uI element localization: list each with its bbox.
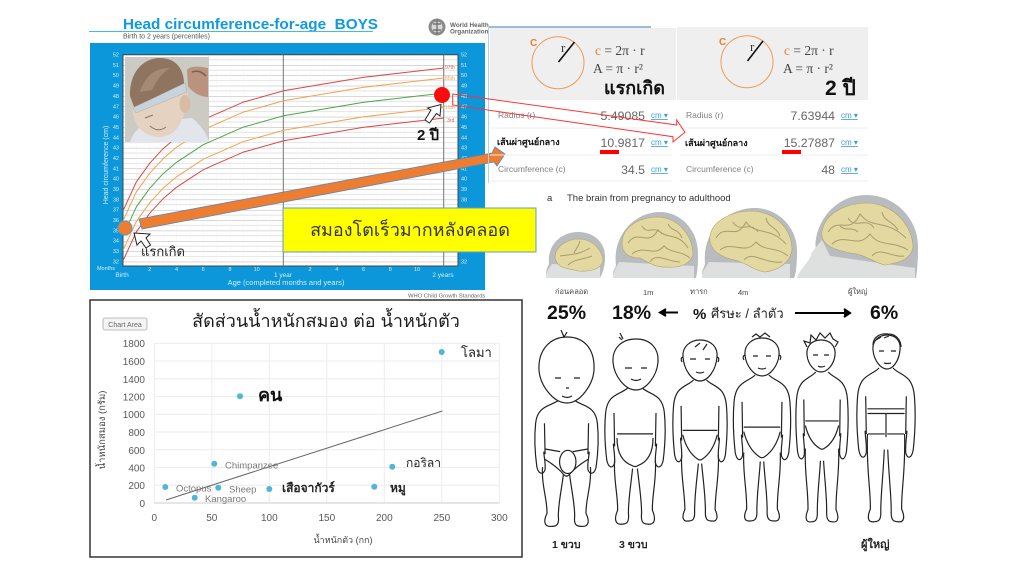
percentile curves <box>123 68 444 261</box>
figure: 1 year old <box>535 330 598 526</box>
label: 2 years: 2 ปี <box>417 127 439 144</box>
calculator: at 2 years: C <box>719 37 726 48</box>
plot grid <box>123 55 458 266</box>
x axis ticks: 0 <box>152 513 158 524</box>
panel: circle calculators <box>453 27 868 183</box>
calculator: at birth: cm ▾ <box>651 138 668 147</box>
x axis title: น้ำหนักตัว (กก) <box>313 533 373 545</box>
x axis labels: 8 <box>228 267 232 273</box>
arrow: red outline to 2-year diameter <box>453 94 685 142</box>
calculator: at birth: 34.5 <box>621 163 645 177</box>
icon: WHO logo: Organization <box>450 28 489 36</box>
right axis ticks: 40 <box>461 177 467 183</box>
blue chart background <box>90 43 485 290</box>
right axis ticks: 44 <box>461 135 467 141</box>
x axis labels: 10 <box>254 267 260 273</box>
panel: WHO head circumference chart: Birth <box>115 272 129 279</box>
panel: WHO head circumference chart: 2 years <box>432 272 454 279</box>
callout: rapid growth <box>283 208 536 252</box>
calculator: at birth: Circumference (c) <box>498 164 566 174</box>
figure caption: 1 year: 1 ขวบ <box>552 539 581 551</box>
x axis labels: 10 <box>414 267 420 273</box>
icon: WHO logo <box>428 18 489 36</box>
left axis ticks: 36 <box>113 218 119 224</box>
figure: teen <box>796 333 848 522</box>
x axis labels: 2 <box>148 267 151 273</box>
marker: 2 years <box>434 87 450 103</box>
arrow: growth from birth to two years <box>139 147 505 229</box>
calculator: at birth <box>488 27 676 183</box>
calculator: at 2 years: c = 2π · r <box>784 43 834 58</box>
left axis ticks <box>113 52 119 265</box>
point labels: หมู <box>390 481 406 496</box>
right axis ticks: 45 <box>461 125 467 131</box>
point labels: คน <box>258 385 283 405</box>
x axis labels: 8 <box>389 267 392 273</box>
y axis ticks: 0 <box>139 499 145 510</box>
calculator: at 2 years: r <box>750 39 755 54</box>
calculator: at birth: cm ▾ <box>651 165 668 174</box>
x axis labels: 4 <box>175 267 178 273</box>
y axis ticks: 1400 <box>123 375 145 386</box>
figure: 3 years old <box>605 333 665 524</box>
percentile labels: 85th <box>445 76 455 82</box>
stage labels: 4m <box>738 288 748 297</box>
right axis ticks: 43 <box>461 146 467 152</box>
x axis ticks: 150 <box>318 513 336 524</box>
y axis ticks: 200 <box>128 481 145 492</box>
x axis ticks: 50 <box>206 513 218 524</box>
x axis labels: Months <box>97 266 115 272</box>
arrow: 2 years pointer <box>425 104 441 123</box>
point labels: Chimpanzee <box>225 460 278 472</box>
left axis ticks: 35 <box>113 228 119 234</box>
heading: a <box>547 193 553 204</box>
figure caption: adult: ผู้ใหญ่ <box>861 537 889 552</box>
percentile labels: 15th <box>445 105 455 111</box>
title: head circumference: Head circumference-for-age BOYS <box>123 17 378 33</box>
heading: The brain from pregnancy to adulthood <box>567 193 731 204</box>
y axis ticks: 400 <box>128 464 145 474</box>
calculator: at birth: 10.9817 <box>601 136 645 150</box>
left axis ticks: 33 <box>113 249 119 255</box>
x axis ticks: 250 <box>433 513 451 524</box>
left axis ticks: 37 <box>113 208 119 214</box>
calculator: at birth: Radius (r) <box>498 110 535 120</box>
left axis ticks: 44 <box>113 135 119 141</box>
right axis ticks: 32 <box>461 259 467 265</box>
left axis ticks: 42 <box>113 156 119 162</box>
percentages: 18% <box>612 302 651 324</box>
calculator: at 2 years: 7.63944 <box>791 109 835 123</box>
figure: adult <box>857 334 915 522</box>
stage labels: ผู้ใหญ่ <box>848 287 867 296</box>
y axis ticks: 1800 <box>123 339 145 350</box>
x axis ticks: 300 <box>491 513 508 524</box>
panel: body proportion figures <box>535 330 915 552</box>
right axis ticks: 49 <box>461 84 467 90</box>
stage labels: ทารก <box>690 287 708 296</box>
panel: WHO head circumference chart <box>89 17 536 300</box>
source note: WHO Child Growth Standards <box>408 294 485 300</box>
figure: older child <box>733 333 791 521</box>
right axis ticks: 47 <box>461 104 467 110</box>
y axis ticks: 600 <box>128 446 145 457</box>
stage labels: 1m <box>643 288 653 297</box>
right axis ticks <box>461 52 467 265</box>
point labels: โลมา <box>461 345 492 360</box>
point labels: Sheep <box>229 484 256 496</box>
calculator: at 2 years: cm ▾ <box>841 111 858 120</box>
left axis ticks: 47 <box>113 104 119 110</box>
trend line <box>166 411 442 500</box>
percentages: 25% <box>547 302 586 324</box>
right axis ticks: 41 <box>461 166 467 172</box>
left axis ticks: 39 <box>113 187 119 193</box>
percentile labels <box>445 65 455 124</box>
percentages <box>547 302 898 324</box>
arrow: right <box>795 309 850 317</box>
left axis ticks: 45 <box>113 125 119 131</box>
photo: baby head measurement <box>125 57 209 142</box>
left axis ticks: 32 <box>113 259 119 265</box>
calculator: at birth: c = 2π · r <box>595 43 645 58</box>
calculator: at 2 years: Radius (r) <box>686 110 723 120</box>
panel: WHO head circumference chart: 1 year <box>274 272 293 279</box>
data points <box>162 349 445 501</box>
y axis title: น้ำหนักสมอง (กรัม) <box>95 391 108 469</box>
panel: brain from pregnancy to adulthood <box>546 193 918 324</box>
icon: WHO logo: World Health <box>450 22 489 29</box>
x axis labels <box>97 266 420 273</box>
left axis ticks: 34 <box>113 239 119 245</box>
x axis ticks <box>152 513 508 524</box>
y axis ticks: 800 <box>128 428 145 439</box>
calculator: at birth: cm ▾ <box>651 111 668 120</box>
point labels: Octopus <box>176 484 212 494</box>
calculator: at 2 years: Circumference (c) <box>686 164 754 174</box>
y axis ticks <box>123 339 145 510</box>
x axis labels: 6 <box>362 267 365 273</box>
calculator: at birth: A = π · r² <box>593 61 643 76</box>
x axis labels: 4 <box>335 267 338 273</box>
calculator: at 2 years: 2 ปี <box>825 76 856 100</box>
y axis title: Head circumference (cm) <box>103 126 110 204</box>
calculator: at 2 years: A = π · r² <box>783 61 833 76</box>
left axis ticks: 52 <box>113 52 119 58</box>
calculator: at 2 years: cm ▾ <box>841 138 858 147</box>
right axis ticks: 38 <box>461 197 467 203</box>
point labels <box>176 345 492 505</box>
label: head to trunk ratio: % <box>693 306 706 323</box>
stage labels <box>555 287 867 297</box>
calculator: at birth: r <box>561 40 566 55</box>
right axis ticks: 42 <box>461 156 467 162</box>
calculator: at birth: แรกเกิด <box>604 78 665 98</box>
right axis ticks: 48 <box>461 94 467 100</box>
percentages: 6% <box>870 302 898 324</box>
y axis ticks: 1000 <box>123 410 145 421</box>
calculator: at 2 years: เส้นผ่าศูนย์กลาง <box>685 137 748 149</box>
callout: rapid growth: สมองโตเร็วมากหลังคลอด <box>310 218 510 240</box>
y axis ticks: 1600 <box>123 357 145 368</box>
label: birth: แรกเกิด <box>141 244 185 259</box>
left axis ticks: 51 <box>113 63 119 69</box>
calculator: at birth: 5.49085 <box>601 109 645 123</box>
chart title: สัดส่วนน้ำหนักสมอง ต่อ น้ำหนักตัว <box>192 308 460 331</box>
y axis ticks: 1200 <box>123 392 145 404</box>
x axis ticks: 100 <box>261 513 278 524</box>
brain: 4 months <box>702 208 797 278</box>
left axis ticks: 48 <box>113 94 119 100</box>
point labels: Kangaroo <box>205 494 246 505</box>
panel: brain vs body weight scatter chart <box>90 300 522 557</box>
figure: child <box>673 340 727 521</box>
button: chart area <box>103 318 147 330</box>
brain: adult <box>797 195 918 278</box>
x axis title: Age (completed months and years) <box>228 278 345 287</box>
point labels: กอริลา <box>406 456 441 470</box>
calculator: at 2 years: 15.27887 <box>784 136 835 150</box>
figure caption: 3 years: 3 ขวบ <box>619 539 648 551</box>
right axis ticks: 51 <box>461 63 467 69</box>
brain: before birth <box>546 232 605 278</box>
x axis labels: 2 <box>308 267 312 273</box>
left axis ticks: 49 <box>113 84 119 90</box>
label: head to trunk ratio: ศีรษะ / ลำตัว <box>711 306 784 321</box>
left axis ticks: 46 <box>113 115 119 121</box>
left axis ticks: 38 <box>113 197 119 203</box>
right axis ticks: 52 <box>461 52 467 58</box>
point labels: เสือจากัวร์ <box>282 481 335 495</box>
calculator: at 2 years <box>677 27 868 181</box>
calculator: at birth: เส้นผ่าศูนย์กลาง <box>497 136 560 148</box>
left axis ticks: 50 <box>113 73 119 79</box>
right axis ticks: 39 <box>461 187 467 193</box>
subtitle: Birth to 2 years (percentiles) <box>123 34 210 40</box>
x axis ticks: 200 <box>376 513 393 524</box>
percentile labels: 3rd <box>447 118 454 124</box>
stage labels: ก่อนคลอด <box>555 287 588 296</box>
calculator: at 2 years: cm ▾ <box>841 165 858 174</box>
right axis ticks: 46 <box>461 115 467 121</box>
left axis ticks: 40 <box>113 177 119 183</box>
brain: 1 month <box>613 212 698 278</box>
x axis labels: 6 <box>202 267 205 273</box>
arrow: left <box>660 309 678 316</box>
calculator: at birth: C <box>530 38 537 49</box>
calculator: at 2 years: 48 <box>821 163 835 177</box>
button: chart area: Chart Area <box>108 322 142 329</box>
arrow: birth pointer <box>134 233 150 248</box>
percentile labels: 97th <box>445 65 455 71</box>
left axis ticks: 41 <box>113 166 119 172</box>
right axis ticks: 50 <box>461 73 467 79</box>
left axis ticks: 43 <box>113 146 119 152</box>
marker: birth <box>118 221 132 235</box>
gridlines <box>154 343 499 503</box>
